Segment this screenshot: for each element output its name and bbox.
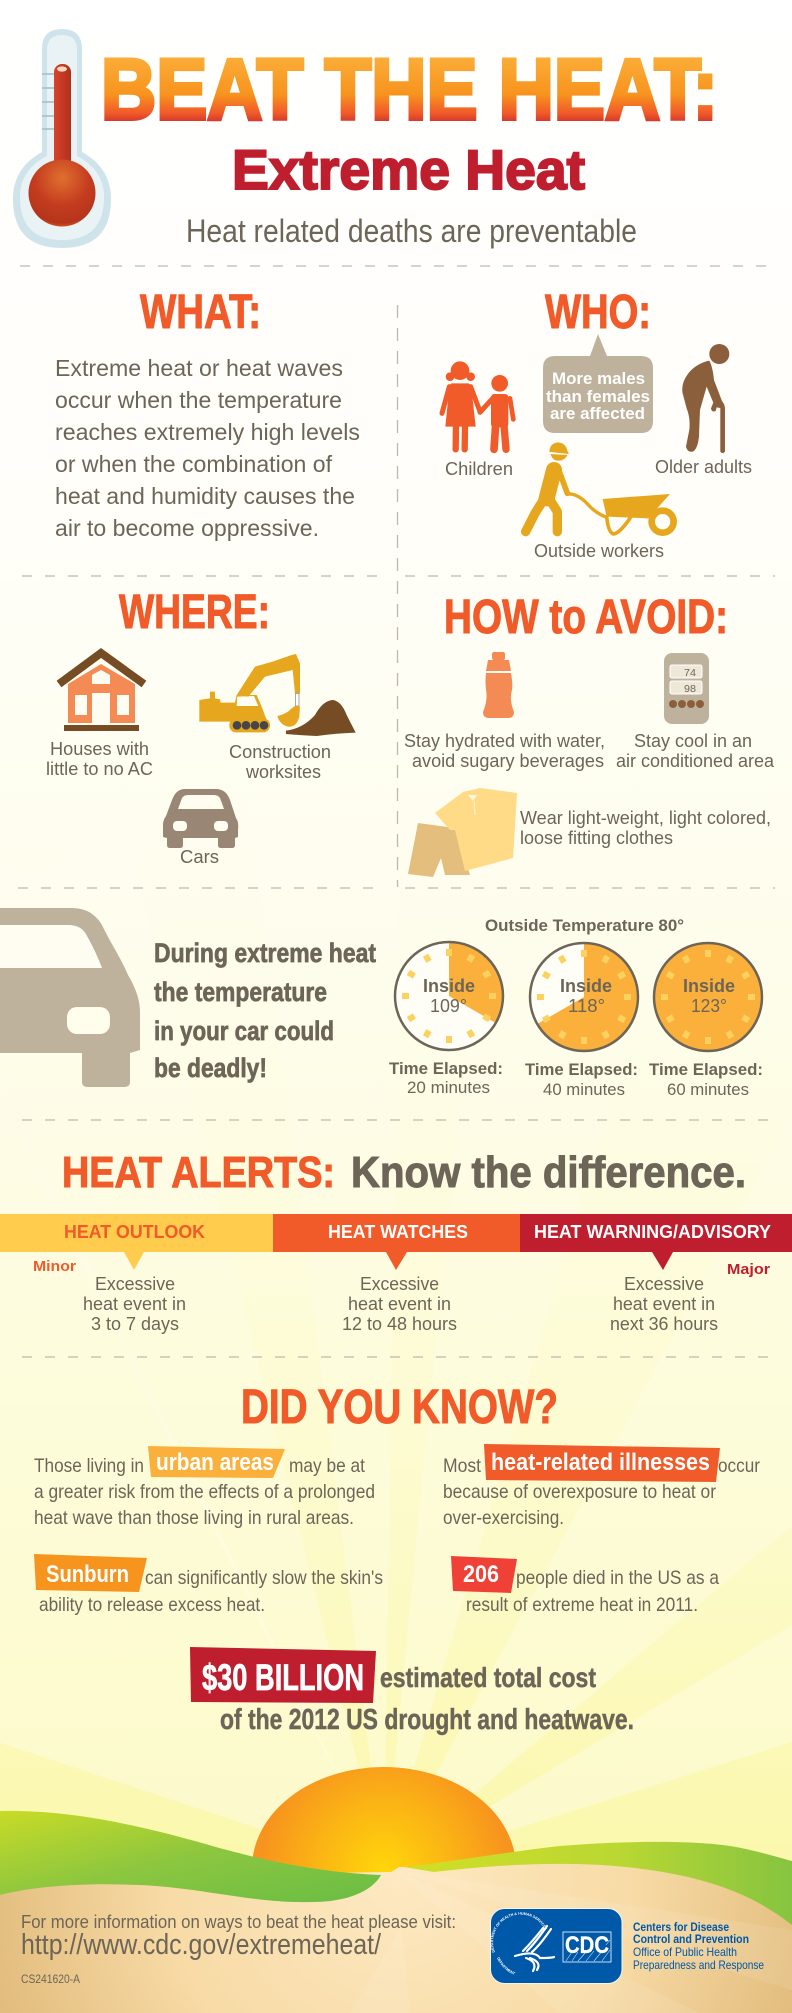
callout: more males — [543, 334, 653, 433]
time label: 40 minutes — [525, 1060, 638, 1099]
icon: clothes — [408, 788, 517, 877]
icon: thermostat — [664, 653, 709, 724]
label: hydrate: Stay hydrated with water, — [404, 731, 605, 751]
panel: where — [46, 586, 356, 867]
time label: 60 minutes: 60 minutes — [667, 1080, 749, 1099]
fact: 206 deaths: people died in the US as a — [516, 1567, 719, 1589]
title: BEAT THE HEAT: — [101, 42, 718, 138]
label: construction worksites: worksites — [245, 762, 321, 782]
text: watches: 12 to 48 hours — [342, 1314, 457, 1334]
hhs seal: DEPARTMENT OF HEALTH & HUMAN SERVICES USA — [490, 1912, 547, 1953]
callout: more males: More males — [552, 369, 645, 388]
clock: 20 minutes: Inside — [423, 976, 475, 996]
clock: 40 minutes: Inside — [560, 976, 612, 996]
label: stay cool — [616, 731, 775, 771]
fact: heat-related illnesses: heat-related illnesses — [491, 1449, 710, 1476]
fact: heat-related illnesses — [443, 1444, 760, 1529]
footer text: http://www.cdc.gov/extremeheat/ — [21, 1929, 382, 1961]
heading: where: WHERE: — [119, 586, 270, 639]
fact: urban areas: Those living in — [34, 1455, 144, 1477]
what description: occur when the temperature — [55, 387, 342, 413]
time label: 40 minutes: Time Elapsed: — [525, 1060, 638, 1079]
text: warning: next 36 hours — [610, 1314, 718, 1334]
heading: heat alerts: HEAT ALERTS: — [62, 1148, 335, 1197]
bar: heat watches: HEAT WATCHES — [328, 1222, 468, 1242]
text: warning: Excessive — [624, 1274, 704, 1294]
time label: 60 minutes — [649, 1060, 763, 1099]
text: outlook: heat event in — [83, 1294, 186, 1314]
panel: car temperature — [0, 908, 763, 1099]
icon: house — [59, 653, 144, 731]
text: outlook: Excessive — [95, 1274, 175, 1294]
clock: 20 minutes — [395, 942, 503, 1050]
fact: 30 billion: of the 2012 US drought and heatwave. — [220, 1704, 634, 1736]
fact: 30 billion — [190, 1647, 634, 1736]
footer text — [21, 1912, 456, 1986]
clock: 60 minutes: Inside — [683, 976, 735, 996]
label: minor: Minor — [33, 1258, 76, 1275]
bar: heat outlook — [0, 1214, 273, 1270]
fact: sunburn: ability to release excess heat. — [39, 1594, 265, 1616]
car warning text: be deadly! — [154, 1053, 267, 1083]
icon: water bottle — [483, 652, 514, 718]
clock: 20 minutes: 109° — [430, 996, 467, 1016]
cdc logo — [490, 1908, 622, 1984]
cdc organisation text: Preparedness and Response — [633, 1958, 764, 1972]
time label: 40 minutes: 40 minutes — [543, 1080, 625, 1099]
time label: 20 minutes — [389, 1059, 503, 1097]
heading: did you know: DID YOU KNOW? — [241, 1381, 558, 1434]
cdc organisation text: Control and Prevention — [633, 1932, 749, 1946]
what description: Extreme heat or heat waves — [55, 355, 343, 381]
clock: 60 minutes: 123° — [691, 996, 727, 1016]
fact: urban areas: a greater risk from the effects of a prolonged — [34, 1481, 375, 1503]
panel: heat alerts — [0, 1148, 792, 1334]
car warning text: the temperature — [154, 977, 327, 1007]
car warning text — [154, 938, 376, 1083]
fact: heat-related illnesses: occur — [718, 1455, 760, 1477]
tagline: Heat related deaths are preventable — [186, 213, 637, 249]
icon: children — [442, 361, 513, 449]
thermometer icon — [13, 29, 111, 248]
label: construction worksites — [229, 742, 331, 782]
time label: 20 minutes: Time Elapsed: — [389, 1059, 503, 1078]
cdc organisation text — [633, 1920, 764, 1972]
fact: urban areas: heat wave than those living in rural areas. — [34, 1507, 354, 1529]
car warning text: in your car could — [154, 1016, 334, 1046]
label: outside workers: Outside workers — [534, 541, 664, 561]
fact: 206 deaths — [451, 1556, 719, 1616]
icon: excavator — [199, 654, 356, 736]
label: construction worksites: Construction — [229, 742, 331, 762]
icon: car — [163, 789, 238, 848]
fact: heat-related illnesses: over-exercising. — [443, 1507, 564, 1529]
label: houses: little to no AC — [46, 759, 153, 779]
fact: sunburn — [34, 1554, 383, 1616]
label: clothes: Wear light-weight, light colored, — [520, 808, 771, 828]
fact: 206 deaths: result of extreme heat in 2011. — [466, 1594, 698, 1616]
label: clothes: loose fitting clothes — [520, 828, 673, 848]
time label: 20 minutes: 20 minutes — [407, 1078, 490, 1097]
cdc mark: CDC — [565, 1932, 609, 1959]
heading: who: WHO: — [545, 286, 651, 339]
icon: large car — [0, 908, 140, 1087]
bar: heat warning — [520, 1214, 792, 1270]
right green hill — [404, 1842, 792, 1925]
sand — [0, 1860, 792, 2013]
sun — [252, 1767, 516, 1969]
what description: reaches extremely high levels — [55, 419, 360, 445]
fact: heat-related illnesses: Most — [443, 1455, 482, 1477]
footer text: CS241620-A — [21, 1974, 80, 1986]
hhs seal: DEPARTMENT — [497, 1957, 516, 1974]
text: watches: heat event in — [348, 1294, 451, 1314]
label: hydrate: avoid sugary beverages — [412, 751, 604, 771]
heading: what: WHAT: — [140, 286, 261, 339]
what description — [55, 355, 360, 541]
text: watches: Excessive — [360, 1274, 439, 1294]
clock: 60 minutes — [654, 943, 762, 1051]
fact: 30 billion: $30 BILLION — [202, 1657, 364, 1698]
icon: older adult — [682, 344, 729, 453]
left green hill — [0, 1811, 381, 1902]
panel: did you know — [34, 1381, 760, 1736]
label: older adults: Older adults — [655, 457, 752, 477]
footer text: For more information on ways to beat the heat please visit: — [21, 1912, 456, 1932]
hhs seal — [490, 1912, 556, 1974]
clock: 40 minutes — [530, 943, 638, 1051]
heading: heat alerts: Know the difference. — [351, 1148, 746, 1197]
text: warning: heat event in — [613, 1294, 715, 1314]
fact: urban areas: urban areas — [156, 1449, 274, 1476]
bar: heat warning: HEAT WARNING/ADVISORY — [534, 1222, 771, 1242]
fact: sunburn: can significantly slow the skin's — [145, 1567, 383, 1589]
cdc organisation text: Office of Public Health — [633, 1945, 737, 1959]
icon: thermostat: 98 — [684, 684, 696, 695]
label: stay cool: Stay cool in an — [634, 731, 752, 751]
heading: heat alerts — [62, 1148, 746, 1197]
label: major: Major — [727, 1261, 770, 1278]
text: watches — [342, 1274, 457, 1334]
icon: outside worker — [526, 442, 674, 534]
callout: more males: are affected — [550, 404, 645, 423]
label: stay cool: air conditioned area — [616, 751, 775, 771]
label: outside temperature: Outside Temperature 80° — [485, 917, 684, 935]
time label: 60 minutes: Time Elapsed: — [649, 1060, 763, 1079]
label: hydrate — [404, 731, 605, 771]
clock: 40 minutes: 118° — [568, 996, 605, 1016]
subtitle: extreme heat: Extreme Heat — [232, 138, 585, 201]
cdc organisation text: Centers for Disease — [633, 1920, 729, 1934]
label: houses: Houses with — [50, 739, 149, 759]
icon: thermostat: 74 — [684, 668, 696, 679]
fact: 206 deaths: 206 — [463, 1561, 499, 1588]
fact: urban areas: may be at — [289, 1455, 366, 1477]
what description: or when the combination of — [55, 451, 333, 477]
fact: urban areas — [34, 1446, 375, 1529]
label: houses — [46, 739, 153, 779]
fact: sunburn: Sunburn — [46, 1561, 129, 1588]
fact: heat-related illnesses: because of overexposure to heat or — [443, 1481, 716, 1503]
fact: 30 billion: estimated total cost — [380, 1662, 596, 1693]
text: warning — [610, 1274, 718, 1334]
label: clothes — [520, 808, 771, 848]
bar: heat watches — [273, 1214, 520, 1270]
heading: how to avoid: HOW to AVOID: — [444, 591, 728, 644]
callout: more males: than females — [546, 387, 650, 406]
bar: heat outlook: HEAT OUTLOOK — [64, 1222, 205, 1242]
what description: air to become oppressive. — [55, 515, 319, 541]
text: outlook: 3 to 7 days — [91, 1314, 179, 1334]
label: cars: Cars — [180, 847, 219, 867]
car warning text: During extreme heat — [154, 938, 376, 968]
text: outlook — [83, 1274, 186, 1334]
panel: what — [55, 286, 360, 541]
panel: who — [442, 286, 752, 561]
panel: how to avoid — [404, 591, 775, 877]
what description: heat and humidity causes the — [55, 483, 355, 509]
label: children: Children — [445, 459, 513, 479]
sun rays — [0, 800, 792, 1870]
